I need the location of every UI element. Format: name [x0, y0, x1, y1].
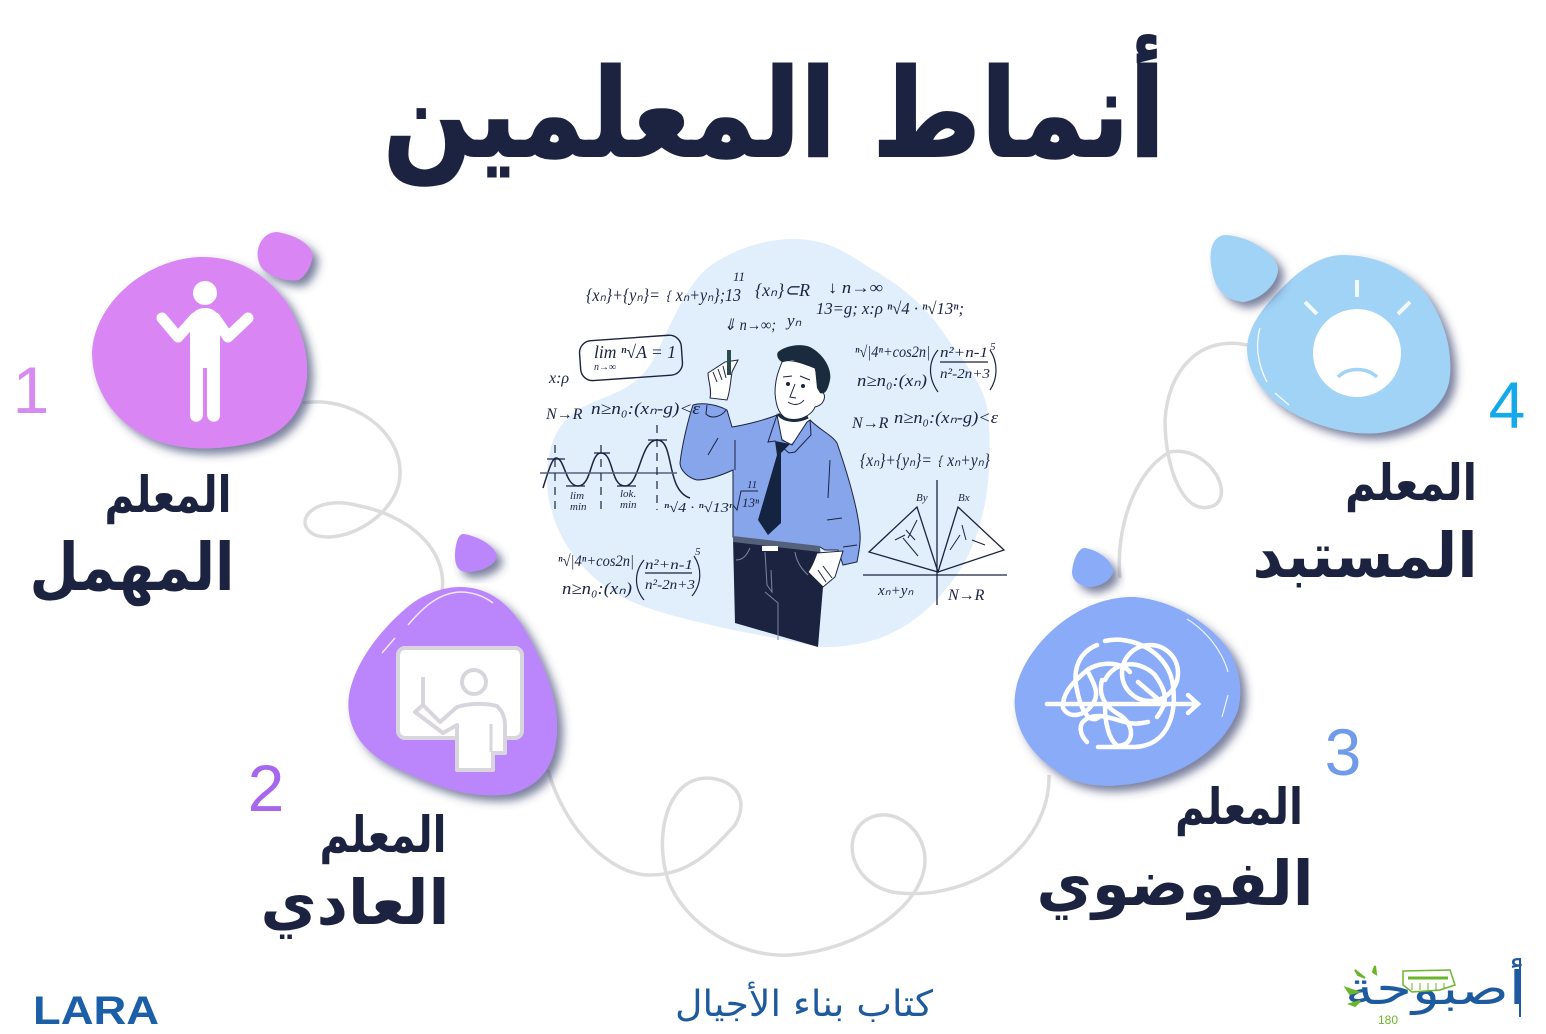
label	[30, 466, 234, 607]
math notes: min	[570, 501, 587, 513]
math notes: ⁿ√4 · ⁿ√13ⁿ	[664, 501, 735, 516]
footer book title: كتاب بناء الأجيال	[675, 981, 934, 1025]
math notes: 11	[733, 269, 745, 284]
math notes: n≥n₀:(xₙ-g)<ε	[894, 408, 998, 427]
math notes: n≥n₀:(xₙ)	[562, 579, 632, 598]
label: الفوضوي	[1036, 847, 1314, 920]
math notes: lok.	[620, 488, 636, 500]
raised hand	[708, 360, 738, 400]
label: المهمل	[30, 529, 234, 607]
illustration: teacher at math board	[540, 239, 1007, 647]
logo: Osbouha 180: أصبوحة	[1345, 958, 1525, 1016]
icon: tangled line	[1047, 640, 1198, 747]
math notes: n²-2n+3	[645, 578, 695, 593]
small blob	[1211, 235, 1278, 302]
math notes: By	[916, 492, 928, 504]
eyes and smile	[786, 382, 790, 386]
label: المستبد	[1252, 519, 1478, 592]
small blob	[258, 232, 312, 280]
small blob	[1072, 548, 1113, 587]
logo: LARA: LARA	[33, 989, 159, 1033]
number 3: 3	[1325, 715, 1361, 789]
formula continuing onto shirt: 13ⁿ	[742, 495, 760, 510]
math notes: 5	[695, 546, 701, 558]
small blob	[455, 534, 497, 572]
panel: teacher 1	[13, 232, 312, 607]
math notes: yₙ	[785, 311, 802, 330]
neck	[778, 410, 810, 445]
math notes: n²+n-1	[645, 558, 693, 573]
label	[1036, 778, 1314, 920]
math notes: ↓ n→∞	[828, 278, 883, 297]
math notes: xₙ+yₙ	[877, 583, 914, 599]
math notes: n≥n₀:(xₙ)	[857, 371, 927, 390]
connecting curves	[303, 343, 1247, 955]
label: المعلم	[104, 466, 232, 524]
number 2: 2	[248, 751, 284, 825]
math notes: x:ρ	[548, 370, 569, 387]
label	[1252, 454, 1478, 592]
background blob	[547, 239, 990, 647]
math notes: Bx	[958, 492, 970, 504]
math notes: min	[620, 499, 637, 511]
label: العادي	[260, 866, 450, 939]
math notes: N→R	[545, 406, 583, 423]
hair	[777, 345, 830, 393]
blob highlights	[382, 592, 493, 653]
math notes: {xₙ}+{yₙ}=﹛xₙ+yₙ}	[860, 450, 991, 470]
marker	[727, 350, 731, 375]
panel: teacher 4	[1211, 235, 1525, 592]
main blob	[1015, 597, 1240, 786]
icon: person shrugging	[162, 281, 248, 422]
blob highlights	[1258, 328, 1289, 405]
panel: teacher 3	[1015, 548, 1361, 920]
label	[260, 806, 450, 939]
math notes: n²+n-1	[940, 345, 988, 361]
math notes: lim ⁿ√A = 1	[594, 342, 676, 362]
math notes: ⁿ√|4ⁿ+cos2n|	[855, 344, 930, 361]
formula continuing onto shirt	[733, 479, 760, 510]
panel: teacher 2	[248, 534, 557, 939]
title: أنماط المعلمين	[383, 35, 1165, 186]
number 1: 1	[13, 353, 49, 427]
math notes: 13=g; x:ρ ⁿ√4 · ⁿ√13ⁿ;	[816, 299, 964, 318]
lower hand	[808, 551, 843, 587]
math notes: n→∞	[594, 362, 616, 373]
head	[775, 361, 824, 420]
main blob	[348, 587, 557, 795]
formula continuing onto shirt: 11	[747, 479, 757, 491]
math notes	[540, 269, 998, 604]
math notes: {xₙ}⊂R	[755, 280, 810, 300]
blob highlights	[1187, 619, 1228, 717]
main blob	[92, 257, 307, 448]
icon: teacher at board	[398, 648, 522, 770]
trousers	[733, 538, 823, 647]
icon: frowning light bulb	[1305, 280, 1410, 397]
logo: Osbouha 180: 180	[1378, 1013, 1398, 1027]
math notes: N→R	[947, 587, 985, 604]
number 4: 4	[1489, 368, 1525, 442]
beard line	[778, 414, 808, 420]
math notes: N→R	[851, 415, 889, 432]
formula over sleeve: n≥n₀:(xₙ-g)<ε	[591, 399, 700, 418]
label: المعلم	[1345, 454, 1477, 512]
shirt	[680, 404, 860, 565]
tie	[758, 441, 790, 535]
man	[591, 345, 860, 647]
math notes: lim	[570, 490, 584, 502]
math notes: ⁿ√|4ⁿ+cos2n|	[558, 553, 634, 570]
label: المعلم	[320, 806, 446, 864]
main blob	[1247, 255, 1450, 433]
math notes: ⇓ n→∞;	[724, 317, 776, 334]
math notes: 5	[990, 341, 996, 353]
math notes: n²-2n+3	[940, 367, 990, 382]
logo: Osbouha 180	[1345, 958, 1525, 1027]
belt	[733, 536, 820, 552]
geometry diagram	[863, 480, 1007, 605]
math notes: {xₙ}+{yₙ}=﹛xₙ+yₙ};13	[586, 285, 741, 305]
collar	[768, 415, 811, 453]
label: المعلم	[1175, 778, 1303, 836]
